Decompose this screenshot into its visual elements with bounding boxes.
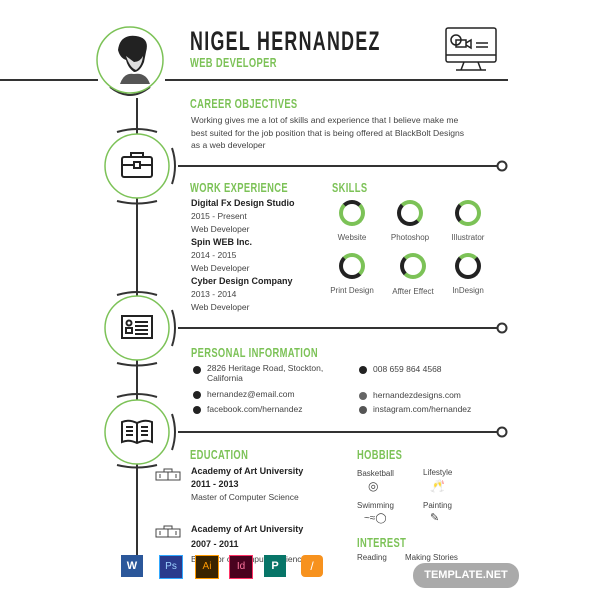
text: ◎ [368, 479, 378, 493]
text: 🥂 [430, 479, 445, 493]
text: Web Developer [191, 302, 249, 312]
text: Photoshop [391, 233, 429, 242]
text: PERSONAL INFORMATION [191, 345, 318, 360]
text: SKILLS [332, 180, 367, 195]
text: Digital Fx Design Studio [191, 198, 295, 208]
text: 2014 - 2015 [191, 250, 236, 260]
text: Print Design [330, 286, 374, 295]
text: Web Developer [191, 263, 249, 273]
text: 2826 Heritage Road, Stockton, [207, 363, 323, 373]
icon: briefcase [121, 152, 153, 178]
text: Working gives me a lot of skills and experience that I believe make me [191, 115, 458, 125]
text: Web Developer [191, 224, 249, 234]
work experience [190, 180, 295, 312]
software icons: Id [237, 561, 245, 572]
career objectives [190, 96, 464, 150]
software icons: Ai [203, 561, 211, 572]
skills [330, 180, 484, 296]
text: Illustrator [452, 233, 484, 242]
hobbies [357, 447, 458, 562]
software icons: W [127, 560, 137, 572]
icon: id card [121, 315, 153, 339]
text: Website [338, 233, 366, 242]
text: 008 659 864 4568 [373, 364, 442, 374]
text: WORK EXPERIENCE [190, 180, 288, 195]
text: 2013 - 2014 [191, 289, 236, 299]
title: NIGEL HERNANDEZ [190, 26, 381, 56]
text: as a web developer [191, 140, 266, 150]
text: facebook.com/hernandez [207, 404, 302, 414]
text: Making Stories [405, 553, 458, 562]
personal information [191, 345, 471, 414]
text: Basketball [357, 469, 394, 478]
icon: portrait [118, 36, 150, 84]
text: HOBBIES [357, 447, 402, 462]
text: Spin WEB Inc. [191, 237, 252, 247]
text: Cyber Design Company [191, 276, 293, 286]
text: Lifestyle [423, 468, 452, 477]
text: 2015 - Present [191, 211, 247, 221]
software icons: / [310, 559, 314, 573]
text: 2011 - 2013 [191, 479, 239, 489]
text: 2007 - 2011 [191, 539, 239, 549]
watermark [413, 563, 519, 588]
text: instagram.com/hernandez [373, 404, 471, 414]
icon: monitor [445, 27, 497, 71]
text: hernandezdesigns.com [373, 390, 461, 400]
software icons [121, 555, 323, 579]
text: hernandez@email.com [207, 389, 295, 399]
icon: book [121, 420, 153, 444]
text: INTEREST [357, 535, 406, 550]
education [156, 447, 306, 564]
text: Master of Computer Science [191, 492, 299, 502]
watermark: TEMPLATE.NET [424, 569, 508, 581]
text: InDesign [452, 286, 484, 295]
text: Swimming [357, 501, 394, 510]
text: ✎ [430, 512, 439, 524]
text: California [207, 373, 243, 383]
software icons: Ps [165, 561, 177, 572]
text: CAREER OBJECTIVES [190, 96, 298, 111]
text: Painting [423, 501, 452, 510]
text: Reading [357, 553, 387, 562]
text: Academy of Art University [191, 524, 303, 534]
subtitle: WEB DEVELOPER [190, 55, 277, 70]
text: best suited for the job position that is being offered at BlackBolt Designs [191, 128, 464, 138]
text: EDUCATION [190, 447, 248, 462]
text: ~≈◯ [364, 513, 387, 524]
text: Bachelor of Computer Science [191, 554, 306, 564]
text: Academy of Art University [191, 466, 303, 476]
software icons: P [271, 560, 279, 572]
text: Affter Effect [392, 287, 434, 296]
